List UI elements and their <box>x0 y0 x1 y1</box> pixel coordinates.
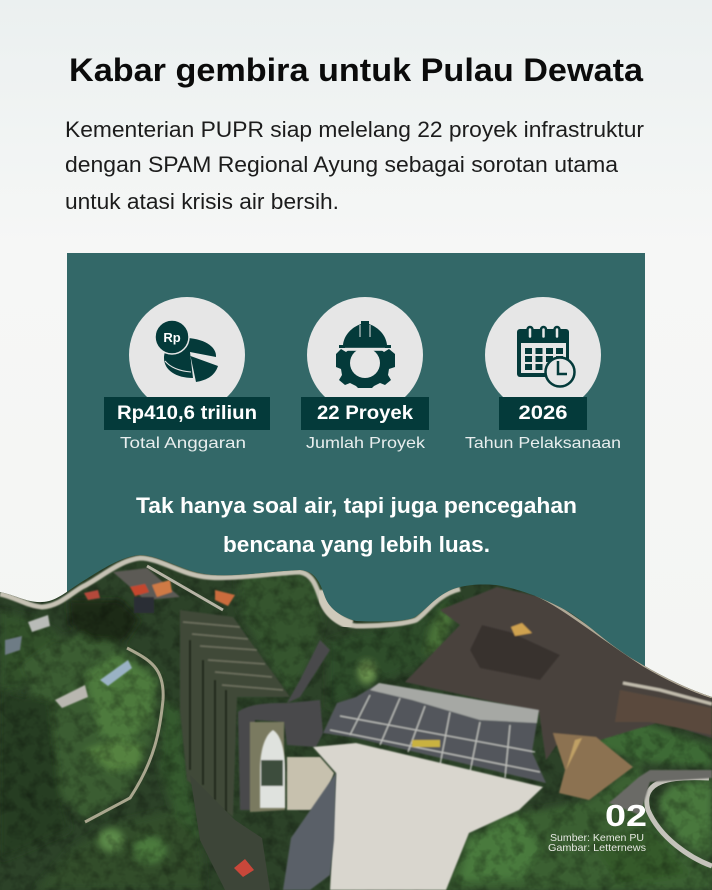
panel: statistics background <box>67 253 645 703</box>
access road and parking <box>238 640 330 812</box>
callout text <box>136 493 577 557</box>
stat: implementation year <box>465 297 621 452</box>
aerial photo of the dam <box>0 550 712 890</box>
bright rim along slope <box>536 595 712 697</box>
concrete panels <box>323 683 546 783</box>
label: Total Anggaran <box>120 435 246 452</box>
callout text: bencana yang lebih luas. <box>223 532 490 557</box>
icon: coin and pie chart <box>129 297 245 413</box>
source credits: Sumber: Kemen PU <box>550 832 644 844</box>
title: Kabar gembira untuk Pulau Dewata <box>69 52 643 88</box>
dark spillway wall <box>283 773 336 890</box>
spillway intake <box>260 730 334 810</box>
stat: total budget <box>104 297 270 452</box>
icon: coin and pie chart: Rp <box>163 330 181 345</box>
terraced slope <box>180 610 290 817</box>
vegetation texture <box>0 550 712 890</box>
intro paragraph <box>65 117 644 214</box>
forested base slope <box>190 775 270 890</box>
source credits <box>548 832 646 854</box>
stat: number of projects <box>301 297 429 452</box>
spillway concrete chute <box>313 743 543 890</box>
value: 2026 <box>518 403 568 424</box>
icon: hard hat and gear <box>307 297 423 413</box>
value box <box>499 397 587 430</box>
value: 22 Proyek <box>317 403 413 424</box>
parked vehicles area <box>609 770 712 815</box>
widened road bend <box>321 590 352 625</box>
hillside road <box>147 566 223 610</box>
source credits: Gambar: Letternews <box>548 842 646 854</box>
left hillside vegetation <box>0 572 712 890</box>
winding road, bottom right <box>647 778 712 866</box>
value: Rp410,6 triliun <box>117 403 257 424</box>
label: Jumlah Proyek <box>306 435 426 452</box>
intro paragraph: Kementerian PUPR siap melelang 22 proyek infrastruktur <box>65 117 644 142</box>
label: Tahun Pelaksanaan <box>465 435 621 452</box>
icon: calendar and clock <box>485 297 601 413</box>
value box <box>301 397 429 430</box>
callout text: Tak hanya soal air, tapi juga pencegahan <box>136 493 577 518</box>
intro paragraph: untuk atasi krisis air bersih. <box>65 189 339 214</box>
intro paragraph: dengan SPAM Regional Ayung sebagai sorotan utama <box>65 152 619 177</box>
buildings <box>5 568 235 708</box>
value box <box>104 397 270 430</box>
page number: 02 <box>605 798 647 833</box>
red roof <box>234 859 254 877</box>
ridge road <box>0 558 460 626</box>
dark soil slope <box>405 587 712 800</box>
footpath <box>85 648 163 822</box>
